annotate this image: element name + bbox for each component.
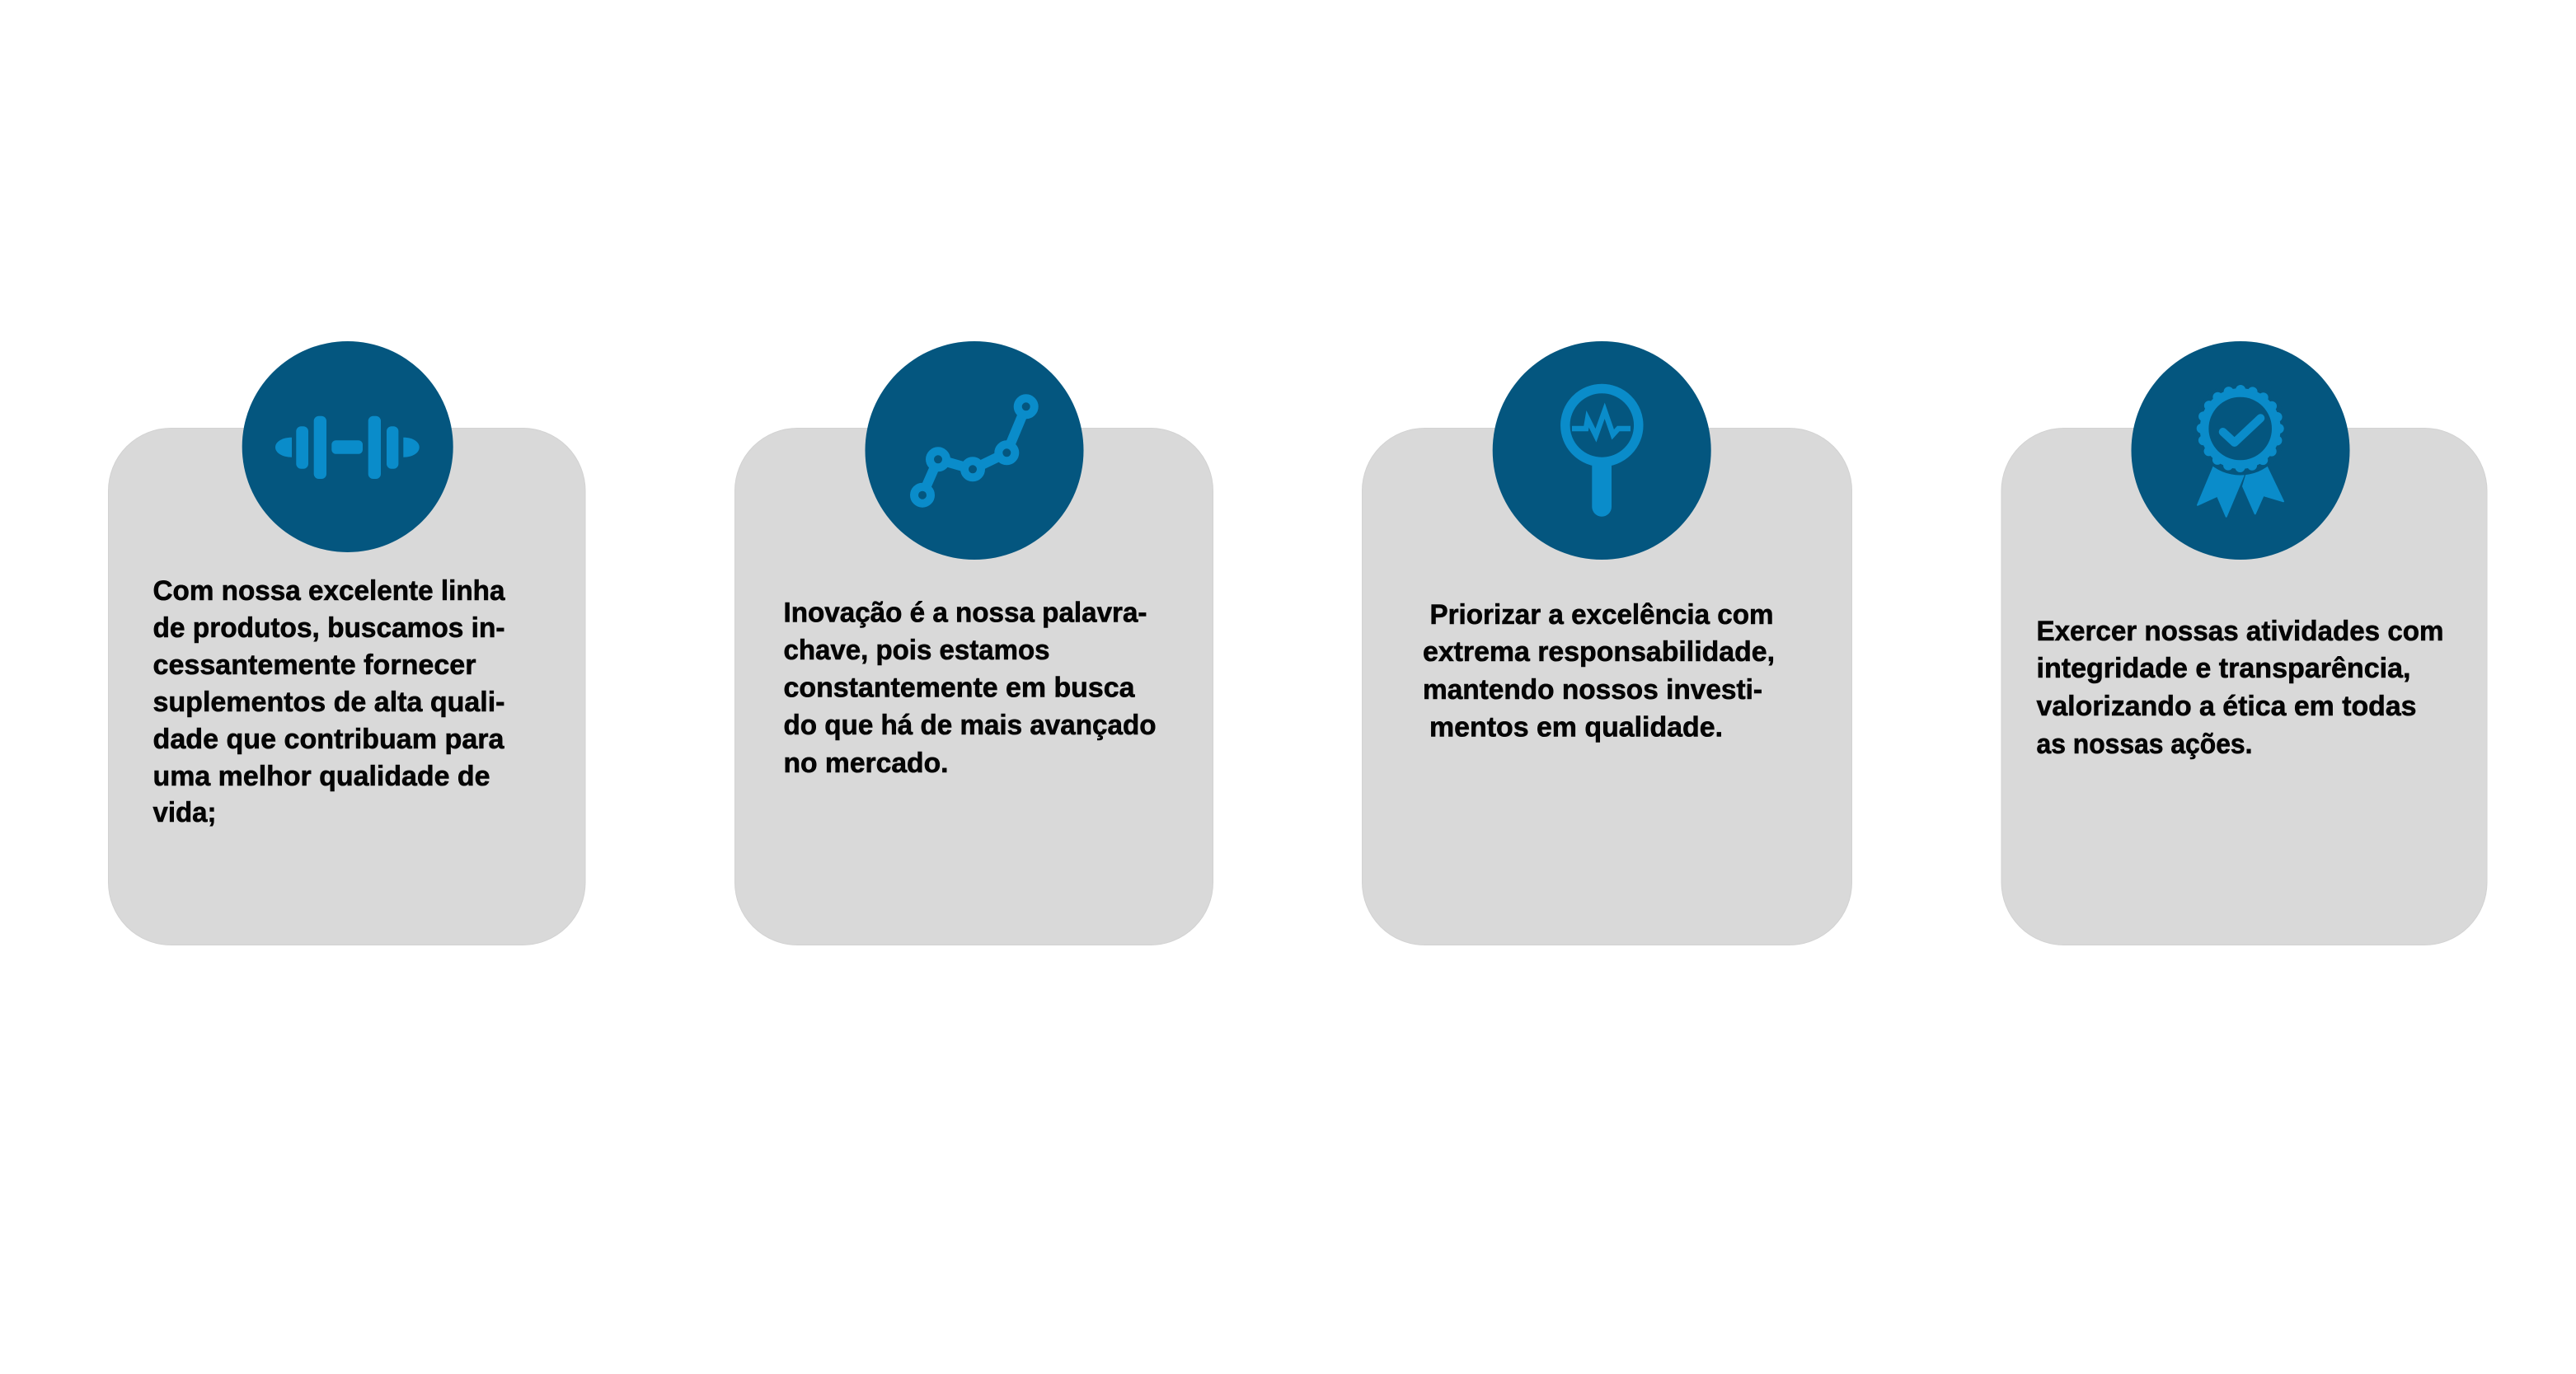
text: produtos: Com nossa excelente linha (153, 575, 506, 607)
icon: award ribbon with check (2194, 382, 2287, 517)
icon circle 2 (866, 341, 1083, 560)
text: excelencia: mantendo nossos investi- (1423, 674, 1762, 706)
icon: dumbbell (275, 416, 420, 479)
text: integridade: integridade e transparência, (2036, 653, 2410, 684)
text: produtos (153, 575, 506, 828)
text: integridade (2036, 616, 2443, 760)
text: inovacao: no mercado. (783, 748, 948, 779)
card background 4 (2001, 429, 2487, 945)
text: produtos: cessantemente fornecer (153, 649, 476, 681)
text: excelencia: Priorizar a excelência com (1429, 599, 1774, 631)
text: integridade: valorizando a ética em todas (2036, 691, 2417, 722)
text: excelencia: mentos em qualidade. (1429, 712, 1723, 743)
text: integridade: as nossas ações. (2036, 729, 2252, 760)
text: inovacao (783, 597, 1156, 779)
card background 2 (735, 429, 1213, 945)
text: produtos: de produtos, buscamos in- (153, 612, 504, 644)
icon circle 4 (2132, 341, 2349, 560)
icon: growth line chart (914, 398, 1035, 504)
text: produtos: vida; (153, 797, 216, 828)
text: inovacao: Inovação é a nossa palavra- (783, 597, 1147, 628)
panel: integridade (2001, 341, 2487, 945)
text: excelencia (1423, 599, 1775, 743)
text: inovacao: constantemente em busca (783, 673, 1136, 704)
text: produtos: dade que contribuam para (153, 724, 505, 755)
text: produtos: uma melhor qualidade de (153, 761, 490, 792)
text: inovacao: do que há de mais avançado (783, 710, 1156, 741)
icon: magnifier with pulse (1565, 389, 1639, 517)
panel: produtos (109, 341, 585, 945)
card background 3 (1362, 429, 1851, 945)
text: integridade: Exercer nossas atividades com (2036, 616, 2443, 647)
panel: inovacao (735, 341, 1213, 945)
icon circle 1 (242, 341, 453, 552)
text: excelencia: extrema responsabilidade, (1423, 636, 1775, 668)
card background 1 (109, 429, 585, 945)
icon circle 3 (1493, 341, 1711, 560)
panel: excelencia (1362, 341, 1851, 945)
text: produtos: suplementos de alta quali- (153, 687, 504, 718)
text: inovacao: chave, pois estamos (783, 635, 1050, 666)
